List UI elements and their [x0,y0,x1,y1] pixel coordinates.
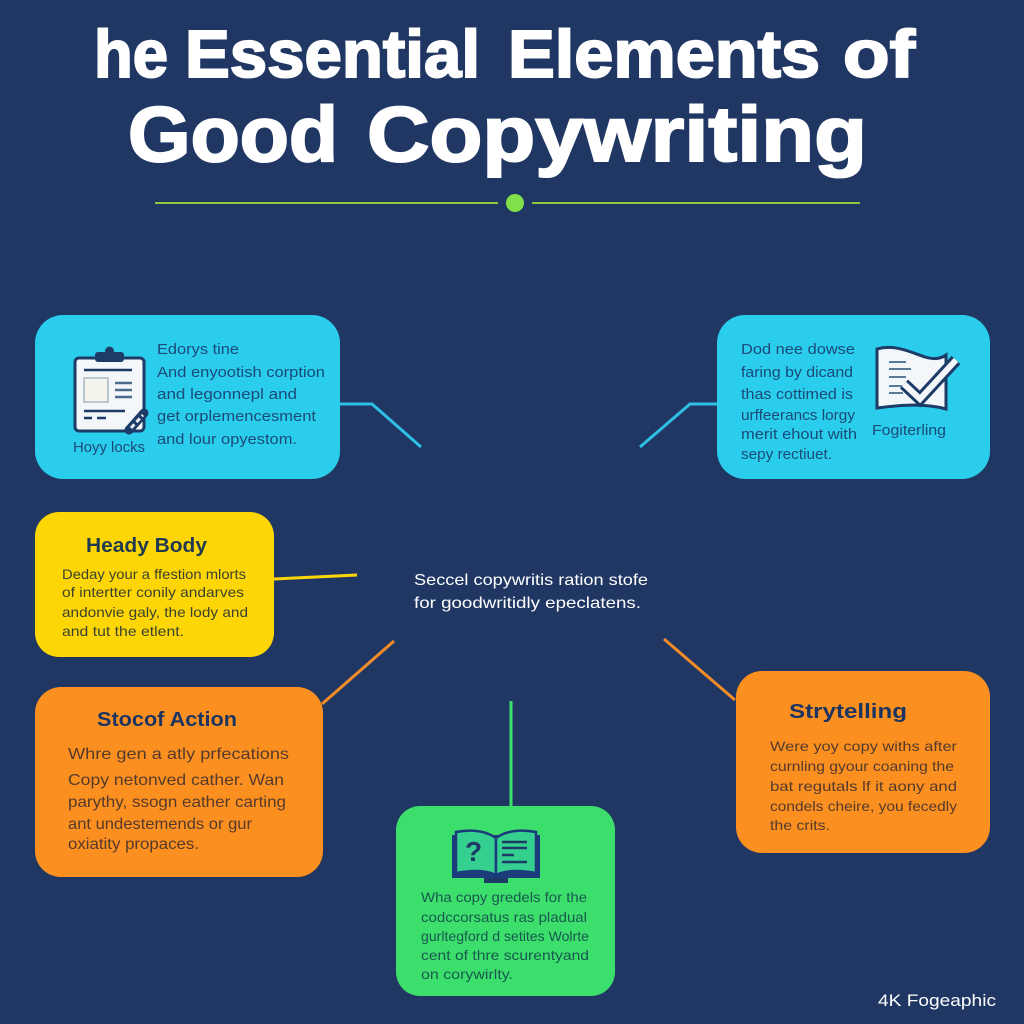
icon caption: Fogiterling [872,422,946,439]
panel text [421,889,589,982]
panel text [62,566,248,639]
panel: top right cyan [717,315,990,479]
panel: yellow [35,512,274,657]
connector: orange left [322,641,394,704]
panel text: cent of thre scurentyand [421,947,589,963]
center text [414,572,648,612]
icon: document with check [877,347,956,409]
panel text: bat regutals lf it aony and [770,778,957,794]
panel text: oxiatity propaces. [68,836,199,853]
title: Good [128,90,338,178]
title: Essential [185,17,480,92]
panel text [770,738,957,833]
panel text: Deday your a ffestion mlorts [62,566,246,582]
center text: for goodwritidly epeclatens. [414,595,641,612]
panel text: the crits. [770,817,830,833]
panel text: curnling gyour coaning the [770,758,954,774]
icon: open book with question mark [452,831,540,883]
panel text: Were yoy copy withs after [770,738,957,754]
title: Elements [508,17,820,92]
panel text: and legonnepl and [157,386,297,403]
panel text: thas cottimed is [741,386,853,403]
title: of [843,17,916,92]
panel: green [396,806,615,996]
panel: orange left [35,687,323,877]
panel text: urffeerancs lorgy [741,407,856,424]
panel text: on corywirlty. [421,966,513,982]
panel text: Whre gen a atly prfecations [68,746,289,763]
panel text: sepy rectiuet. [741,446,832,463]
panel text: codccorsatus ras pladual [421,909,587,925]
icon caption: Hoyy locks [73,439,145,456]
panel text: ant undestemends or gur [68,816,253,833]
panel text: and tut the etlent. [62,623,184,639]
panel text: condels cheire, you fecedly [770,798,957,814]
panel text: get orplemencesment [157,408,317,425]
panel text: Edorys tine [157,341,239,358]
connector: top right [640,404,717,447]
icon: open book with question mark: ? [465,836,482,867]
center text: Seccel copywritis ration stofe [414,572,648,589]
panel text: gurltegford d setites Wolrte [421,928,589,944]
panel heading: Stocof Action [97,709,237,731]
panel text: parythy, ssogn eather carting [68,794,286,811]
title: Copywriting [367,90,867,178]
panel text: faring by dicand [741,364,853,381]
panel text: and lour opyestom. [157,431,297,448]
connector: green [510,701,512,806]
watermark: 4K Fogeaphic [878,991,997,1010]
title [94,17,916,178]
panel: orange right [736,671,990,853]
panel text [68,746,289,853]
title: he [94,17,168,92]
panel text: of intertter conily andarves [62,584,244,600]
panel text: merit ehout with [741,426,857,443]
connector: top left [340,404,421,447]
panel heading: Strytelling [789,701,907,723]
panel text [741,341,857,463]
connector: orange right [664,639,735,700]
panel text: Wha copy gredels for the [421,889,587,905]
panel heading: Heady Body [86,535,208,557]
panel text: And enyootish corption [157,364,325,381]
connector: yellow [274,575,357,579]
icon: clipboard [75,346,144,431]
panel text: Copy netonved cather. Wan [68,772,284,789]
title divider [155,194,860,212]
panel text: andonvie galy, the lody and [62,604,248,620]
panel: top left cyan [35,315,340,479]
panel text [157,341,325,448]
panel text: Dod nee dowse [741,341,855,358]
